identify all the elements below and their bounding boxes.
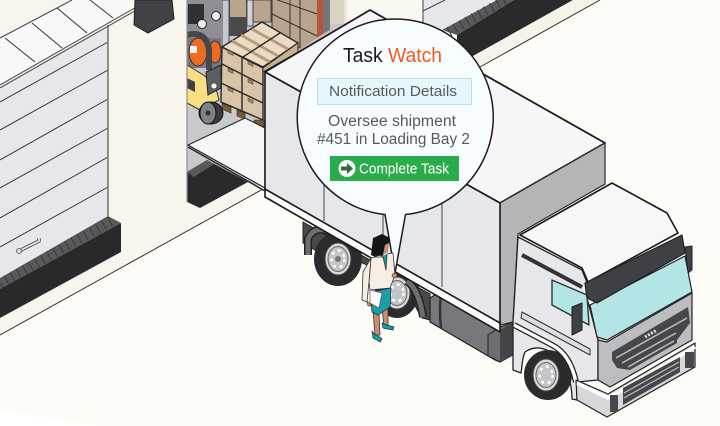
door panel (0, 25, 108, 278)
wheel arch band (514, 325, 576, 382)
awning (0, 0, 140, 85)
top right bay (347, 0, 600, 67)
bay bumper (187, 160, 248, 208)
notification details box (318, 78, 472, 104)
hanging dock light (134, 0, 174, 33)
rear mudguard (308, 230, 330, 255)
bubble body (297, 19, 493, 273)
jacket (362, 253, 395, 302)
woman with folder (362, 234, 397, 342)
wheel 2 (375, 264, 419, 318)
front bumper (576, 343, 695, 417)
dock bumper (0, 216, 121, 289)
complete task button (330, 156, 459, 181)
truck (265, 10, 605, 362)
door handle (19, 238, 39, 251)
side skirt (265, 189, 500, 332)
task description: #451 in Loading Bay 2 (317, 131, 470, 148)
lower wall under bed (187, 145, 265, 188)
hair (371, 234, 390, 257)
folder (370, 290, 382, 308)
apron edge line (0, 189, 263, 335)
hands (367, 273, 397, 306)
truck bed floor (188, 118, 265, 188)
legs (373, 304, 388, 335)
front wheel (524, 350, 572, 400)
red beam (317, 0, 323, 38)
truck cab (513, 183, 695, 417)
right mirror (685, 246, 692, 273)
side stripe (521, 312, 590, 355)
cargo box top (265, 10, 605, 203)
warehouse bay interior (187, 0, 347, 208)
middle mudguard (407, 281, 423, 317)
dark trim (522, 255, 582, 287)
complete task button: Complete Task (359, 162, 450, 178)
left loading door (0, 0, 140, 318)
cargo box side (265, 72, 500, 325)
loading dock apron (0, 0, 263, 335)
speech bubble (297, 19, 493, 273)
door mirror (572, 303, 582, 335)
task description: Oversee shipment (328, 113, 457, 130)
fuel tank (430, 293, 500, 362)
pallet of boxes (221, 22, 298, 130)
wheel 1 (314, 232, 362, 286)
roof (520, 183, 678, 282)
task description (317, 113, 470, 148)
windshield (590, 256, 692, 340)
cab side (513, 237, 598, 400)
shoes (372, 323, 394, 342)
top (381, 254, 389, 275)
grille (612, 307, 690, 370)
cargo box front (500, 143, 605, 325)
back racks (222, 0, 229, 46)
icon: arrow (338, 160, 356, 177)
back boxes (253, 0, 271, 22)
chassis (303, 222, 430, 320)
grille panel (598, 293, 692, 387)
forklift (187, 0, 223, 124)
front mudguard (488, 322, 513, 362)
bubble title: Task Watch (343, 45, 442, 67)
skirt (370, 288, 391, 315)
sun visor (585, 235, 685, 303)
side window (552, 280, 589, 325)
notification details box: Notification Details (329, 83, 457, 100)
bottom light patch (0, 410, 100, 426)
face (383, 243, 389, 255)
